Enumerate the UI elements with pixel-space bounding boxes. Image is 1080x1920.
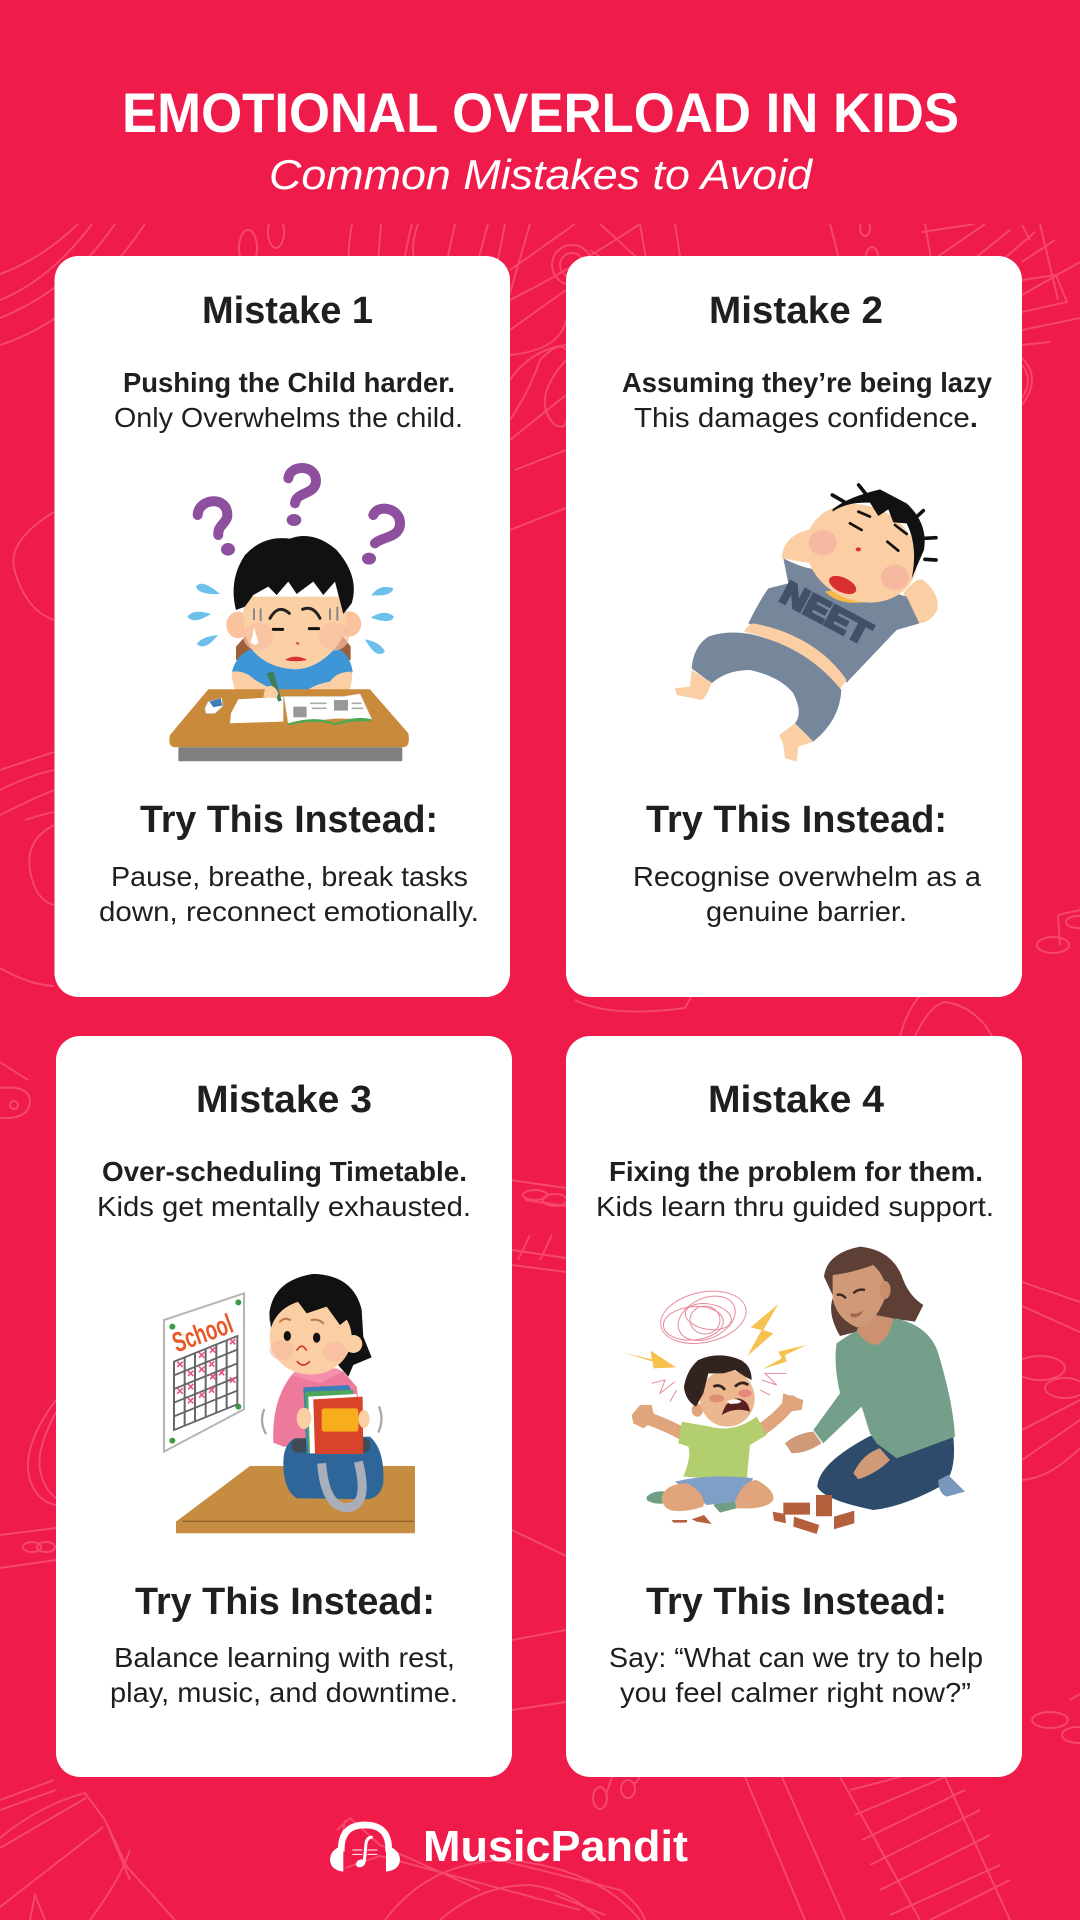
panel: mistake 4 — [566, 1036, 1022, 1777]
text: mistake 1 description: Pushing the Child harder. — [123, 367, 455, 398]
text: advice 1: Pause, breathe, break tasks — [111, 861, 468, 892]
text: mistake 3 description: Kids get mentally exhausted. — [97, 1191, 471, 1222]
brand logo — [330, 1822, 688, 1872]
text: mistake 4 description: Fixing the problem for them. — [609, 1156, 983, 1187]
panel: mistake 2 — [566, 256, 1022, 997]
text: advice 3: Balance learning with rest, — [114, 1642, 455, 1673]
heading: mistake 1: Mistake 1 — [202, 290, 373, 332]
text: advice 3: play, music, and downtime. — [110, 1677, 458, 1708]
text: advice 2: Recognise overwhelm as a — [633, 861, 981, 892]
text: mistake 2 description — [622, 367, 992, 433]
heading: try this instead 4: Try This Instead: — [646, 1581, 947, 1623]
heading: mistake 4: Mistake 4 — [708, 1079, 884, 1121]
illustration: boy lying down in NEET shirt: NEET — [775, 574, 878, 652]
illustration: girl packing books beside overfull school calendar: School — [168, 1308, 237, 1358]
text: mistake 2 description: This damages confidence . — [634, 402, 978, 433]
panel: mistake 3 — [56, 1036, 512, 1777]
subtitle: Common Mistakes to Avoid — [269, 151, 814, 198]
illustration: stressed boy at desk with question marks — [169, 468, 409, 761]
text: advice 4: Say: “What can we try to help — [609, 1642, 983, 1673]
text: advice 2 — [633, 861, 981, 927]
illustration: boy lying down in NEET shirt — [675, 485, 938, 762]
text: advice 1: down, reconnect emotionally. — [99, 896, 479, 927]
illustration: girl packing books beside overfull school calendar — [164, 1274, 415, 1533]
text: mistake 1 description: Only Overwhelms the child. — [114, 402, 463, 433]
text: mistake 4 description: Kids learn thru guided support. — [596, 1191, 994, 1222]
wordmark: MusicPandit — [423, 1822, 688, 1871]
text: mistake 1 description — [114, 367, 463, 433]
heading: mistake 2: Mistake 2 — [709, 290, 883, 332]
text: advice 4 — [609, 1642, 983, 1708]
title — [122, 81, 959, 198]
main heading: EMOTIONAL OVERLOAD IN KIDS — [122, 81, 959, 144]
icon: headphones with music note — [330, 1825, 400, 1872]
panel: mistake 1 — [54, 256, 510, 997]
text: advice 2: genuine barrier. — [706, 896, 907, 927]
text: advice 1 — [99, 861, 479, 927]
text: mistake 4 description — [596, 1156, 994, 1222]
heading: try this instead 1: Try This Instead: — [140, 799, 438, 841]
text: advice 3 — [110, 1642, 458, 1708]
illustration: crying child and calm mother with blocks — [623, 1247, 965, 1534]
heading: try this instead 2: Try This Instead: — [646, 799, 947, 841]
text: mistake 3 description: Over-scheduling Timetable. — [102, 1156, 467, 1187]
text: mistake 3 description — [97, 1156, 471, 1222]
text: mistake 2 description: Assuming they’re being lazy — [622, 367, 992, 398]
heading: mistake 3: Mistake 3 — [196, 1079, 372, 1121]
text: advice 4: you feel calmer right now?” — [620, 1677, 971, 1708]
heading: try this instead 3: Try This Instead: — [135, 1581, 435, 1623]
